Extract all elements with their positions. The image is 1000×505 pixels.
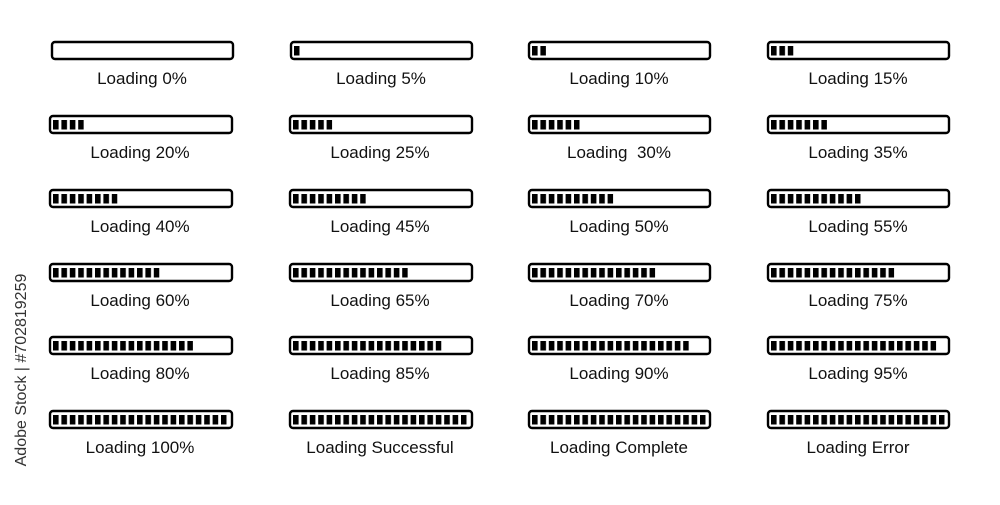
- bar: 40%: [50, 190, 232, 236]
- row 3: [50, 190, 949, 236]
- bar: 10%: Loading 10%: [569, 69, 669, 88]
- bar: 15%: Loading 15%: [808, 69, 908, 88]
- bar: 0%: Loading 0%: [97, 69, 187, 88]
- bar: 100%: [50, 411, 232, 457]
- bar: 35%: [768, 116, 949, 162]
- row 1: [52, 42, 949, 88]
- bar: 55%: Loading 55%: [808, 217, 908, 236]
- bar: 90%: [529, 337, 710, 383]
- bar: 85%: [290, 337, 472, 383]
- bar: 95%: [768, 337, 949, 383]
- bar: 5%: [291, 42, 472, 88]
- bar: successful: [290, 411, 472, 457]
- bar: error: [768, 411, 949, 457]
- bar: error: Loading Error: [806, 438, 910, 457]
- bar: 70%: Loading 70%: [569, 291, 669, 310]
- bar: 20%: Loading 20%: [90, 143, 190, 162]
- bar: 65%: Loading 65%: [330, 291, 430, 310]
- row 5: [50, 337, 949, 383]
- bar: 40%: Loading 40%: [90, 217, 190, 236]
- bar: 85%: Loading 85%: [330, 364, 430, 383]
- bar: 80%: Loading 80%: [90, 364, 190, 383]
- bar: 70%: [529, 264, 710, 310]
- bar: complete: Loading Complete: [550, 438, 688, 457]
- row 4: [50, 264, 949, 310]
- bar: 25%: Loading 25%: [330, 143, 430, 162]
- bar: 30%: [529, 116, 710, 162]
- watermark side text: Adobe Stock | #702819259: [13, 274, 30, 466]
- bar: 60%: [50, 264, 232, 310]
- bar: 90%: Loading 90%: [569, 364, 669, 383]
- bar: 30%: Loading 30%: [567, 143, 671, 162]
- bar: complete: [529, 411, 710, 457]
- bar: 25%: [290, 116, 472, 162]
- bar: 45%: Loading 45%: [330, 217, 430, 236]
- bar: 45%: [290, 190, 472, 236]
- bar: 75%: [768, 264, 949, 310]
- bar: 75%: Loading 75%: [808, 291, 908, 310]
- bar: successful: Loading Successful: [306, 438, 454, 457]
- bar: 60%: Loading 60%: [90, 291, 190, 310]
- bar: 95%: Loading 95%: [808, 364, 908, 383]
- bar: 10%: [529, 42, 710, 88]
- bar: 50%: [529, 190, 710, 236]
- bar: 65%: [290, 264, 472, 310]
- bar: 15%: [768, 42, 949, 88]
- bar: 35%: Loading 35%: [808, 143, 908, 162]
- row 2: [50, 116, 949, 162]
- bar: 50%: Loading 50%: [569, 217, 669, 236]
- row 6: [50, 411, 949, 457]
- bar: 20%: [50, 116, 232, 162]
- bar: 80%: [50, 337, 232, 383]
- bar: 55%: [768, 190, 949, 236]
- bar: 100%: Loading 100%: [86, 438, 194, 457]
- bar: 5%: Loading 5%: [336, 69, 426, 88]
- bar: 0%: [52, 42, 233, 88]
